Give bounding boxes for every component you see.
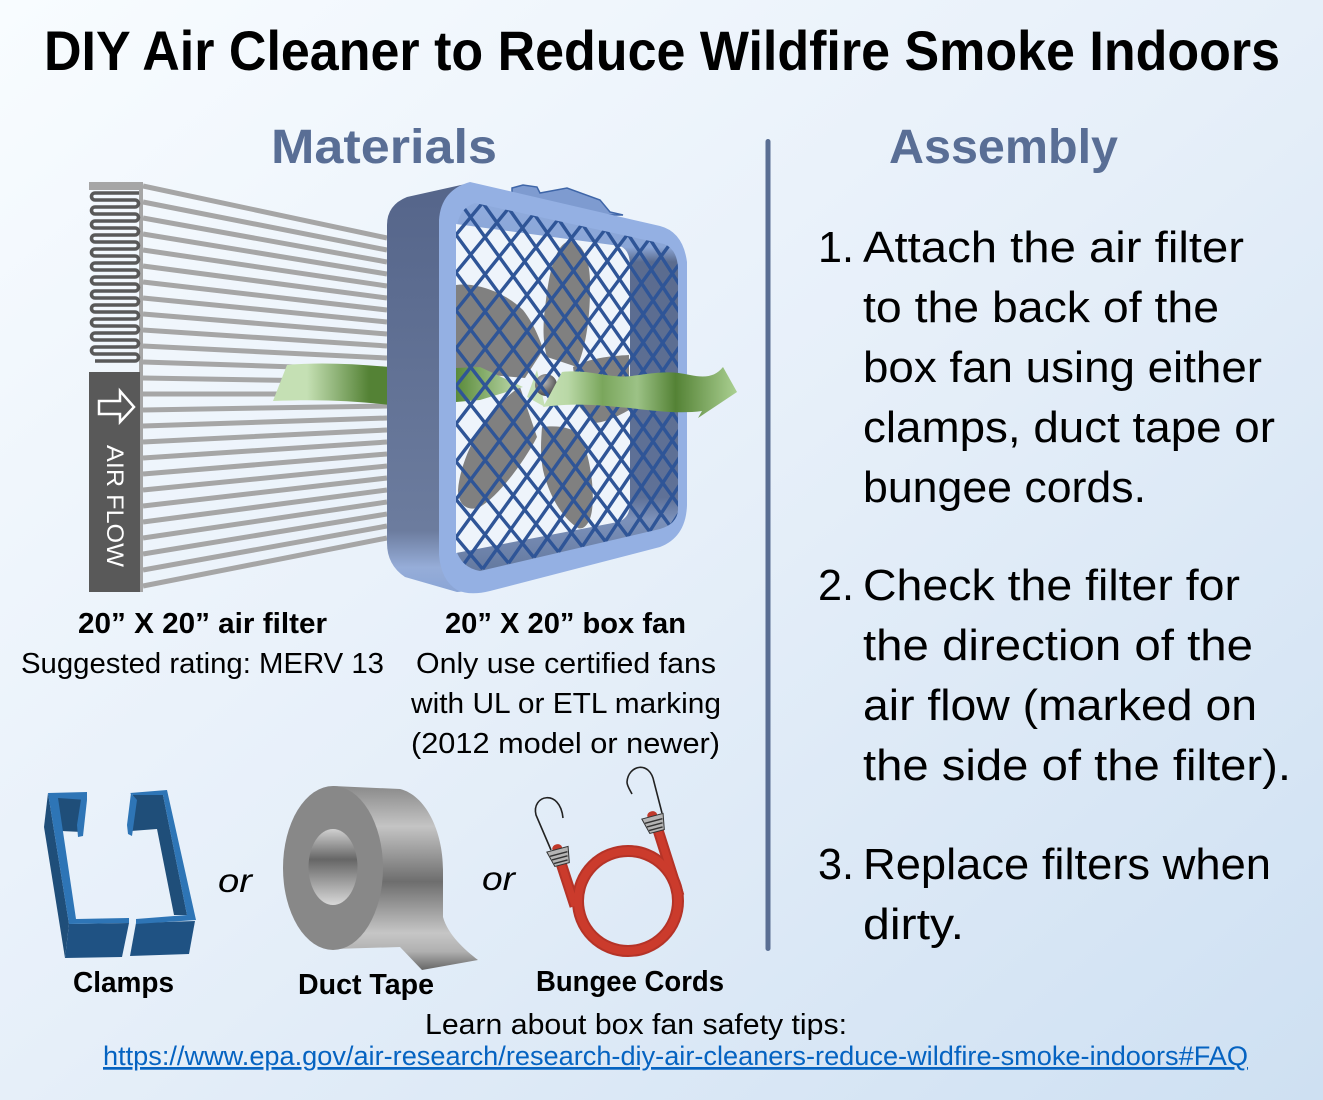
assembly step 1: box fan using either xyxy=(863,343,1262,392)
left clamp xyxy=(44,792,129,958)
caption: box fan xyxy=(410,608,721,760)
box fan requirements xyxy=(410,648,721,760)
icon: bungee cord xyxy=(535,767,679,951)
fan back panel xyxy=(456,224,630,553)
icon: airflow arrow xyxy=(99,391,134,422)
assembly step 1: to the back of the xyxy=(863,283,1219,332)
assembly step 2: Check the filter for xyxy=(863,561,1240,610)
tape roll hole xyxy=(308,829,358,905)
bungee cord loop xyxy=(560,830,679,951)
text: or: or xyxy=(482,860,517,897)
tape roll face xyxy=(283,786,383,950)
filter folds xyxy=(92,193,139,361)
assembly step 2: the side of the filter). xyxy=(863,741,1291,790)
fan wire grille xyxy=(456,197,691,575)
green air stream entering fan xyxy=(273,364,390,405)
air filter rating: Suggested rating: MERV 13 xyxy=(21,648,384,680)
fan handle xyxy=(512,185,623,215)
fan frame xyxy=(439,182,687,593)
icon: duct tape xyxy=(283,786,478,970)
assembly step 3 xyxy=(818,840,1271,949)
label: bungee cords: Bungee Cords xyxy=(536,966,724,998)
vertical divider xyxy=(766,139,770,951)
label: clamps: Clamps xyxy=(73,967,174,999)
assembly step 3: Replace filters when xyxy=(863,840,1271,889)
fan blades xyxy=(456,241,629,528)
safety tips text: Learn about box fan safety tips: xyxy=(425,1009,847,1041)
bungee hooks xyxy=(535,767,662,850)
right bungee cap xyxy=(641,809,667,835)
green air stream behind mesh xyxy=(456,367,545,407)
assembly step 2: air flow (marked on xyxy=(863,681,1257,730)
filter frame xyxy=(89,182,140,190)
assembly step 1: clamps, duct tape or xyxy=(863,403,1275,452)
assembly step 3: dirty. xyxy=(863,900,964,949)
assembly step 1 xyxy=(818,223,1275,512)
assembly step 2: 2. xyxy=(818,561,854,610)
assembly step 1: Attach the air filter xyxy=(863,223,1244,272)
safety tips link: https://www.epa.gov/air-research/research-diy-air-cleaners-reduce-wildfire-smoke-indoors#FAQ xyxy=(103,1041,1248,1071)
heading: Assembly: Assembly xyxy=(889,121,1118,174)
text: or: or xyxy=(218,862,254,899)
icon: clamps xyxy=(44,790,196,958)
fan side xyxy=(387,183,480,592)
assembly step 2: the direction of the xyxy=(863,621,1253,670)
green air stream exit arrow xyxy=(543,367,737,418)
tape roll body xyxy=(333,786,478,970)
fan opening xyxy=(456,203,678,571)
box fan requirements: (2012 model or newer) xyxy=(411,728,720,760)
caption: air filter xyxy=(21,608,384,680)
assembly step 3: 3. xyxy=(818,840,854,889)
label: duct tape: Duct Tape xyxy=(298,969,434,1001)
assembly step 1: 1. xyxy=(818,223,854,272)
box fan requirements: with UL or ETL marking xyxy=(410,688,721,720)
assembly step 2 xyxy=(818,561,1291,790)
assembly step 1: bungee cords. xyxy=(863,463,1146,512)
box fan name: 20” X 20” box fan xyxy=(445,608,686,640)
right clamp xyxy=(127,790,196,956)
illustration: air filter xyxy=(89,182,387,592)
filter pleat lines xyxy=(143,186,387,586)
box fan requirements: Only use certified fans xyxy=(416,648,716,680)
airflow text: AIR FLOW xyxy=(101,445,128,567)
heading: Materials: Materials xyxy=(271,121,497,174)
airflow label box xyxy=(89,372,140,592)
fan hub xyxy=(535,374,557,396)
illustration: box fan xyxy=(387,182,737,593)
air filter name: 20” X 20” air filter xyxy=(78,608,327,640)
left bungee cap xyxy=(546,842,572,868)
